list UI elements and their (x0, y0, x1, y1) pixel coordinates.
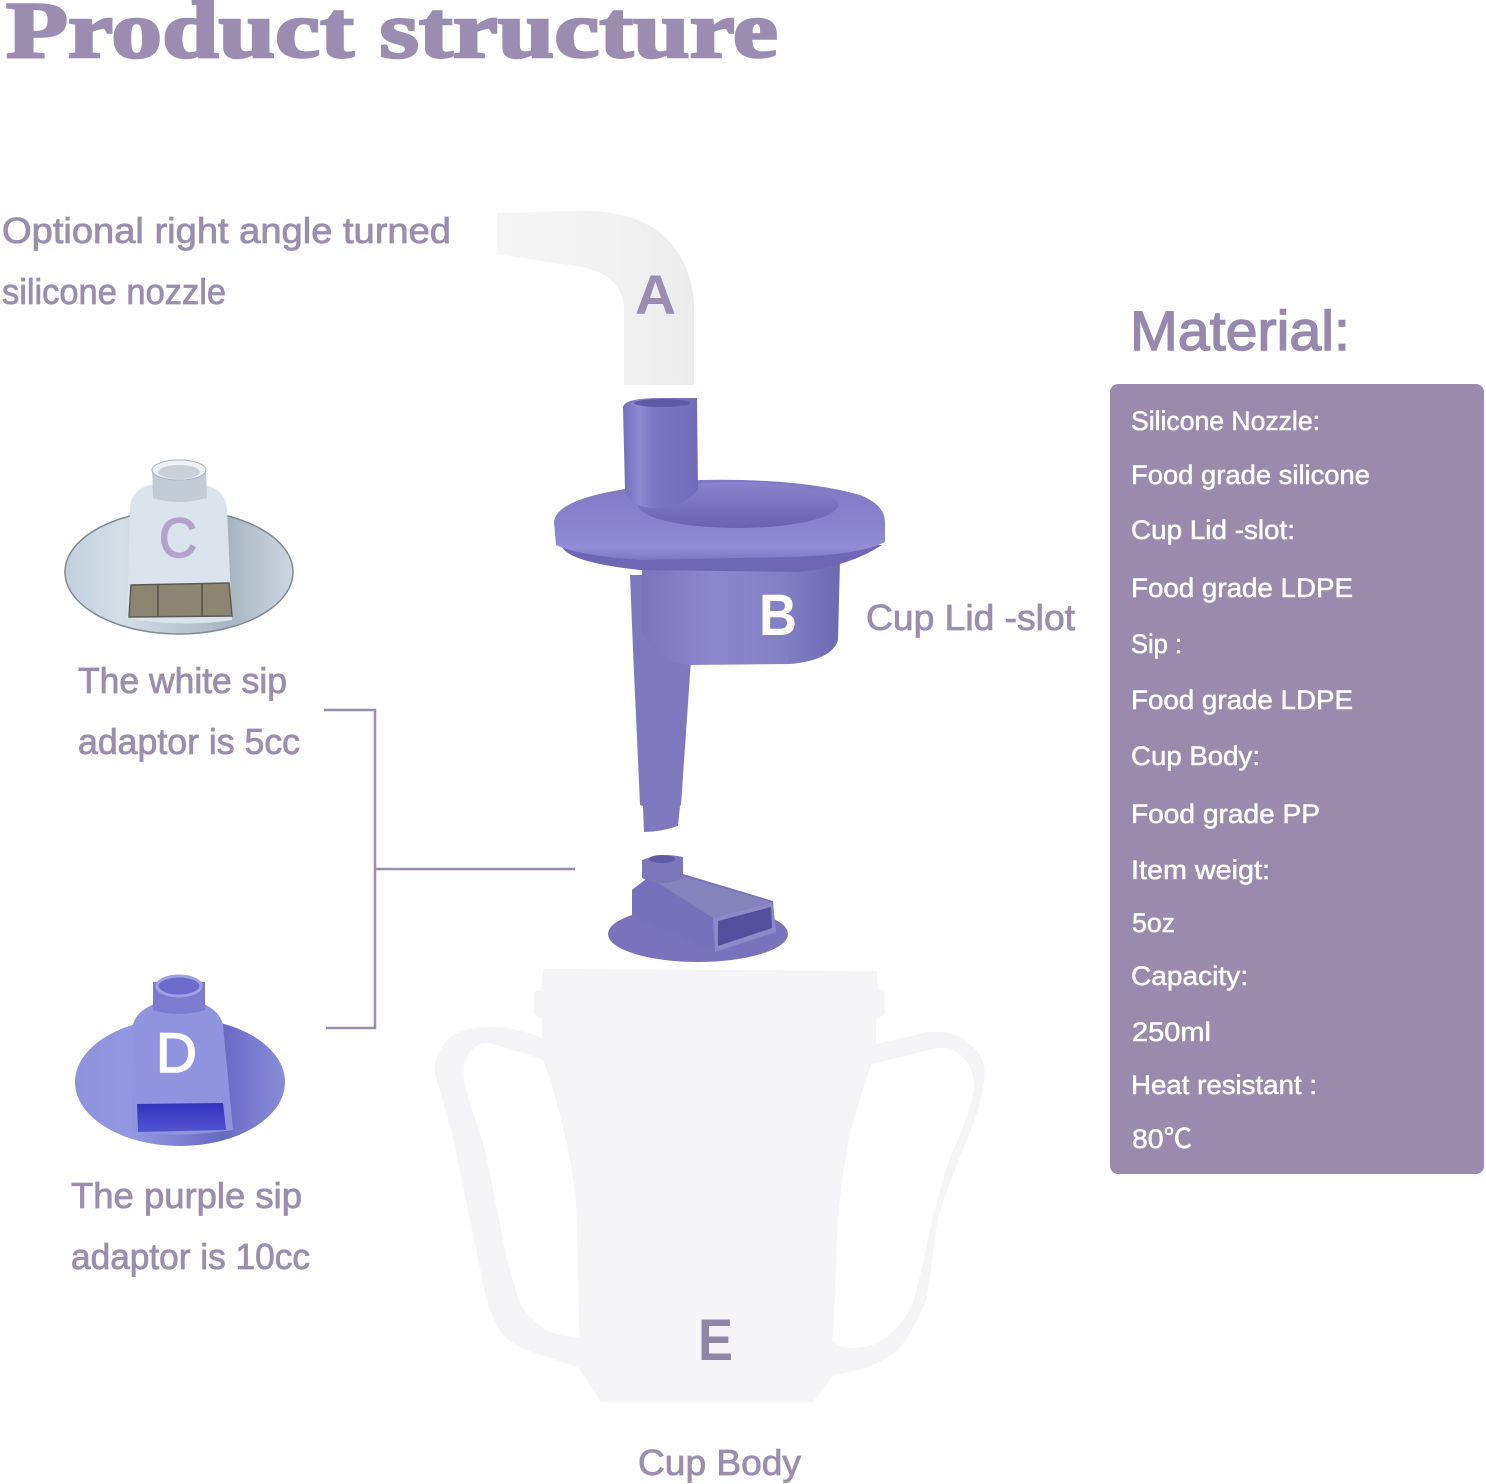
cup body material: Food grade PP (1131, 799, 1320, 829)
letter D: D (156, 1021, 197, 1084)
letter E: E (698, 1308, 733, 1373)
label: white sip adaptor: The white sip (78, 660, 287, 701)
label: white sip adaptor: adaptor is 5cc (78, 721, 300, 762)
item weight: Item weigt: (1131, 855, 1270, 885)
part D: purple sip adaptor (75, 976, 285, 1146)
cup (534, 969, 885, 1402)
bracket connector (324, 710, 575, 1028)
part B: cup lid slot (554, 398, 885, 832)
part A: silicone nozzle: A (635, 263, 676, 326)
item weight (1131, 855, 1270, 938)
silicone nozzle material: Silicone Nozzle: (1131, 406, 1320, 436)
heat resistance: Heat resistant : (1131, 1070, 1317, 1100)
handles (435, 1027, 585, 1370)
label: silicone nozzle: silicone nozzle (2, 271, 226, 312)
sip material: Sip : (1131, 629, 1182, 659)
part A: silicone nozzle (497, 211, 694, 385)
cup lid material: Food grade LDPE (1131, 573, 1353, 603)
panel: material list (1110, 384, 1484, 1174)
capacity: Capacity: (1131, 961, 1248, 991)
part E: cup body (435, 969, 985, 1402)
flange lower lip (561, 545, 882, 572)
silicone nozzle material (1131, 406, 1370, 490)
heading: material: Material: (1130, 299, 1350, 362)
cup lid material: Cup Lid -slot: (1131, 515, 1295, 545)
capacity: 250ml (1132, 1017, 1211, 1047)
label: purple sip adaptor (71, 1175, 310, 1277)
cup body material (1131, 741, 1320, 829)
cup body material: Cup Body: (1131, 741, 1260, 771)
letter C: C (159, 506, 197, 569)
spout (630, 575, 691, 832)
heat resistance: 80℃ (1132, 1124, 1192, 1154)
cup lid material (1131, 515, 1353, 603)
flange (554, 480, 885, 560)
label: silicone nozzle (2, 210, 451, 312)
lid opening (638, 482, 838, 528)
bowl (642, 560, 840, 665)
label: white sip adaptor (78, 660, 300, 762)
label: purple sip adaptor: adaptor is 10cc (71, 1236, 310, 1277)
label: cup lid slot: Cup Lid -slot (866, 597, 1075, 638)
label: purple sip adaptor: The purple sip (71, 1175, 302, 1216)
item weight: 5oz (1132, 908, 1175, 938)
part: adaptor below lid (608, 855, 788, 962)
top tube (623, 398, 698, 508)
letter B: B (759, 583, 797, 648)
label: cup body: Cup Body (638, 1442, 801, 1483)
capacity (1131, 961, 1248, 1047)
heat resistance (1131, 1070, 1317, 1154)
label: silicone nozzle: Optional right angle turned (2, 210, 451, 251)
part C: white sip adaptor (65, 460, 293, 634)
silicone nozzle material: Food grade silicone (1131, 460, 1370, 490)
sip material: Food grade LDPE (1131, 685, 1353, 715)
sip material (1131, 629, 1353, 715)
